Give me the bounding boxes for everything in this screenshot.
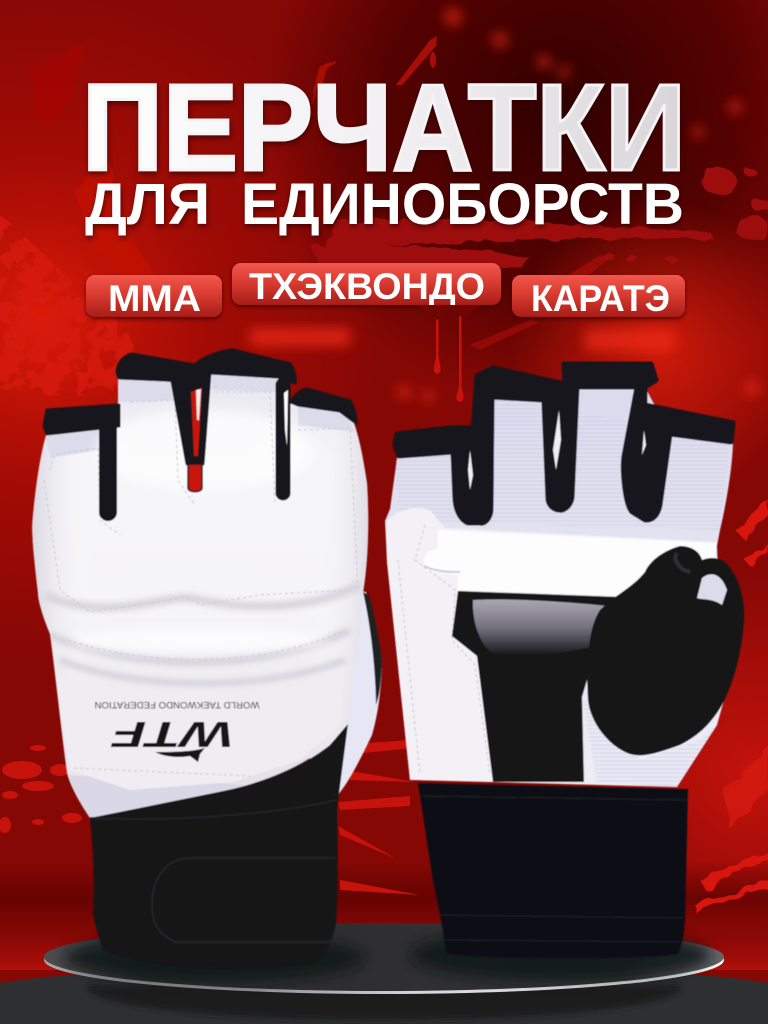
glove body <box>385 387 733 787</box>
left wrist strap <box>90 724 348 968</box>
badge: karate: КАРАТЭ <box>531 278 670 319</box>
palm opening <box>452 591 620 782</box>
finger trim: black bands and slots <box>44 350 356 464</box>
stitching <box>44 392 358 776</box>
wrist mesh on thumb side <box>300 590 382 795</box>
red and white sliver between fingers <box>191 388 202 456</box>
right glove: palm side <box>385 364 744 958</box>
logo: WTF mark <box>110 714 234 762</box>
subtitle: ЕДИНОБОРСТВ <box>241 172 684 237</box>
pad stitching <box>398 525 490 775</box>
text: federation name upside down: WORLD TAEKWONDO FEDERATION <box>94 699 260 710</box>
thumb pocket <box>587 546 744 755</box>
red gap between fingers <box>188 466 202 490</box>
badge: taekwondo: ТХЭКВОНДО <box>249 266 485 307</box>
finger trim: black bands <box>395 364 733 523</box>
subtitle: ДЛЯ <box>85 172 210 237</box>
badge: MMA: ММА <box>108 278 201 319</box>
title: ПЕРЧАТКИ <box>82 60 686 197</box>
paint drips under badges <box>418 305 482 402</box>
platform: dark round stand <box>0 923 768 1024</box>
badge: MMA <box>86 275 222 319</box>
red slot outline <box>188 464 202 492</box>
highlight slivers between fingers <box>468 410 646 490</box>
right wrist cuff <box>418 783 688 958</box>
glove body <box>32 367 368 818</box>
logo: WTF mark: WTF <box>110 714 234 755</box>
mesh texture <box>395 397 730 530</box>
soft shading of padding <box>30 370 375 820</box>
palm pad <box>386 508 717 780</box>
mesh under thumb <box>583 700 717 787</box>
left glove: back of hand <box>30 350 382 968</box>
